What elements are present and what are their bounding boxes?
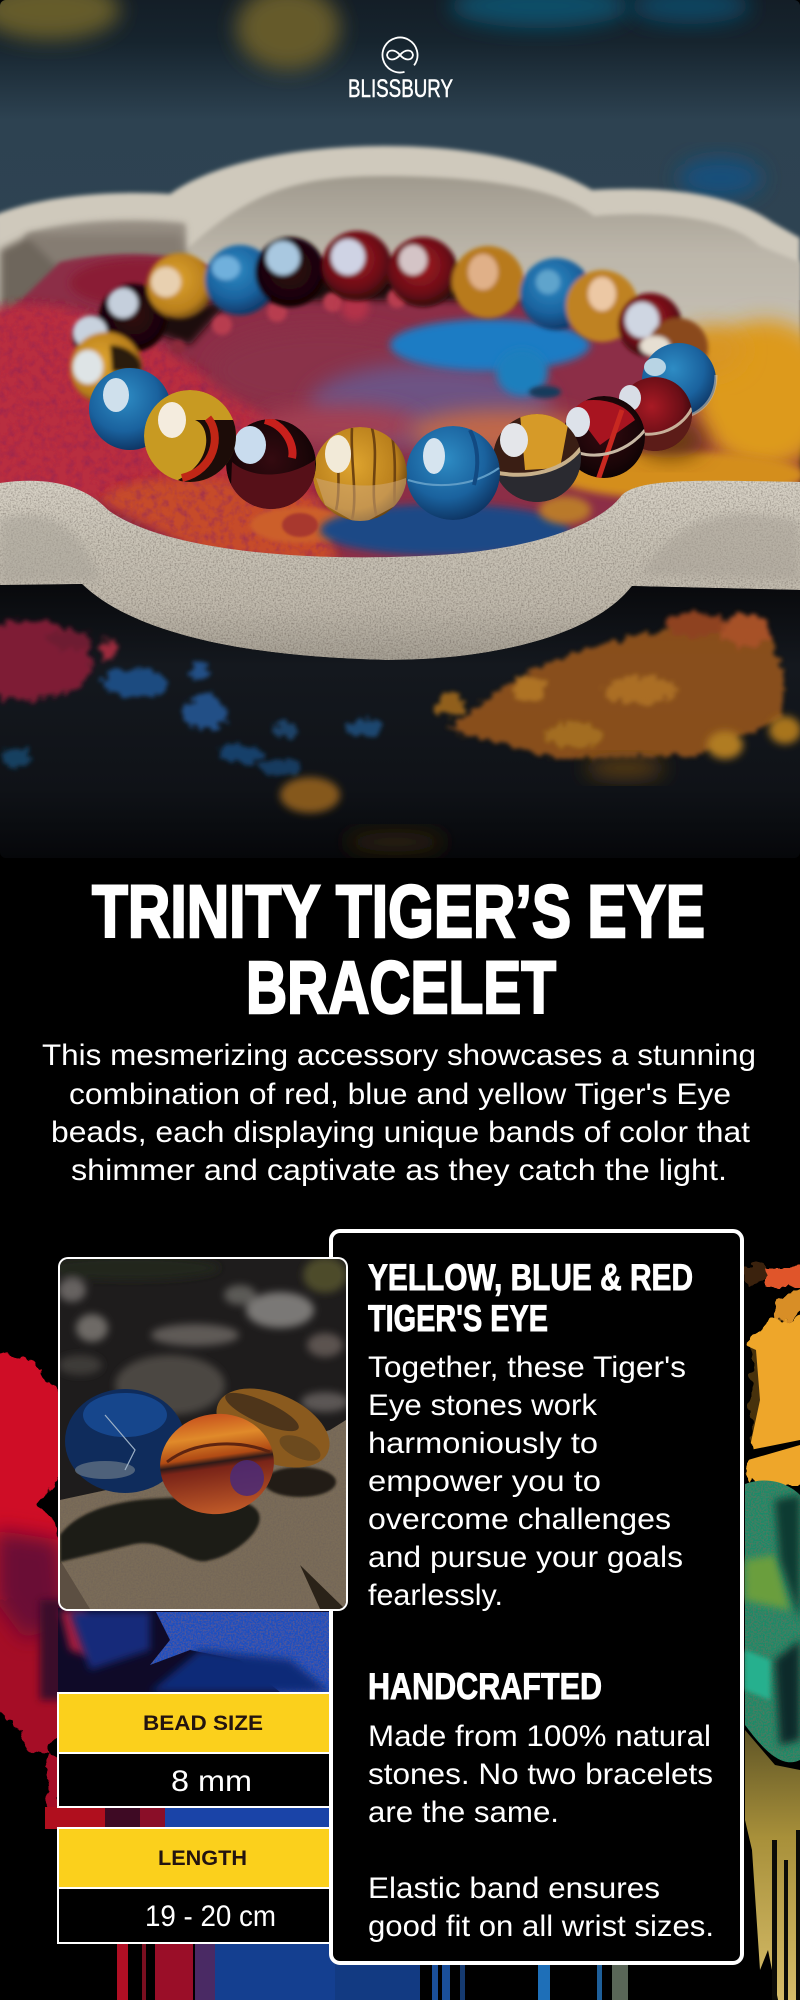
orange banded stone — [160, 1414, 274, 1514]
intro paragraph: This mesmerizing accessory showcases a stunning — [42, 1039, 756, 1072]
heading: stones: TIGER'S EYE — [368, 1298, 548, 1339]
intro paragraph: beads, each displaying unique bands of color that — [51, 1116, 751, 1149]
floor with scattered powder — [0, 584, 800, 858]
dish back wall — [0, 142, 800, 350]
text: stones: harmoniously to — [368, 1427, 598, 1460]
title: BRACELET — [246, 946, 556, 1029]
intro paragraph: combination of red, blue and yellow Tiger's Eye — [69, 1078, 731, 1111]
text: handcrafted: Made from 100% natural — [368, 1720, 711, 1753]
text: handcrafted — [368, 1720, 714, 1943]
blurred background — [0, 0, 800, 300]
text: handcrafted: Elastic band ensures — [368, 1872, 660, 1905]
title — [92, 870, 705, 1029]
stone shadows — [60, 1498, 260, 1562]
specs table: bead size: BEAD SIZE — [143, 1712, 263, 1735]
dish front rim — [0, 481, 800, 660]
powder in dish — [0, 255, 800, 575]
specs table: length — [58, 1828, 330, 1943]
text: handcrafted: stones. No two bracelets — [368, 1758, 713, 1791]
rock slab — [60, 1420, 346, 1609]
stone photo card — [40, 1256, 349, 1611]
paint splash: right side — [745, 1264, 800, 2000]
bottom drips — [117, 1944, 628, 2000]
bracelet beads: front row — [89, 343, 716, 525]
brand name: BLISSBURY — [348, 75, 453, 103]
intro paragraph: shimmer and captivate as they catch the light. — [71, 1154, 727, 1187]
panel: description card — [331, 1231, 742, 1963]
bead shadows and reflections — [144, 278, 522, 307]
brown stone — [216, 1388, 330, 1468]
text: stones: empower you to — [368, 1465, 601, 1498]
text: stones: Together, these Tiger's — [368, 1351, 686, 1384]
text: stones — [368, 1351, 686, 1612]
blurred pebbles — [40, 1256, 349, 1415]
specs table: bead size — [58, 1693, 330, 1807]
text: stones: fearlessly. — [368, 1579, 503, 1612]
heading: stones — [368, 1257, 693, 1339]
blue stone — [65, 1389, 185, 1493]
heading: stones: YELLOW, BLUE & RED — [368, 1257, 693, 1298]
icon: infinity in circle — [379, 34, 421, 76]
text: handcrafted: good fit on all wrist sizes. — [368, 1910, 714, 1943]
intro paragraph — [42, 1039, 756, 1187]
text: stones: Eye stones work — [368, 1389, 598, 1422]
text: handcrafted: are the same. — [368, 1796, 559, 1829]
specs table: length: 19 - 20 cm — [145, 1900, 276, 1933]
text: stones: overcome challenges — [368, 1503, 671, 1536]
bracelet beads: back row — [70, 231, 708, 404]
heading: handcrafted: HANDCRAFTED — [368, 1666, 602, 1707]
specs table: bead size: 8 mm — [171, 1765, 252, 1798]
brand logo — [348, 34, 453, 103]
hero photo: bracelet in powder-filled stone dish — [0, 0, 800, 858]
text: stones: and pursue your goals — [368, 1541, 683, 1574]
paint splash: left side — [0, 1352, 628, 2000]
specs table: length: LENGTH — [158, 1847, 247, 1870]
